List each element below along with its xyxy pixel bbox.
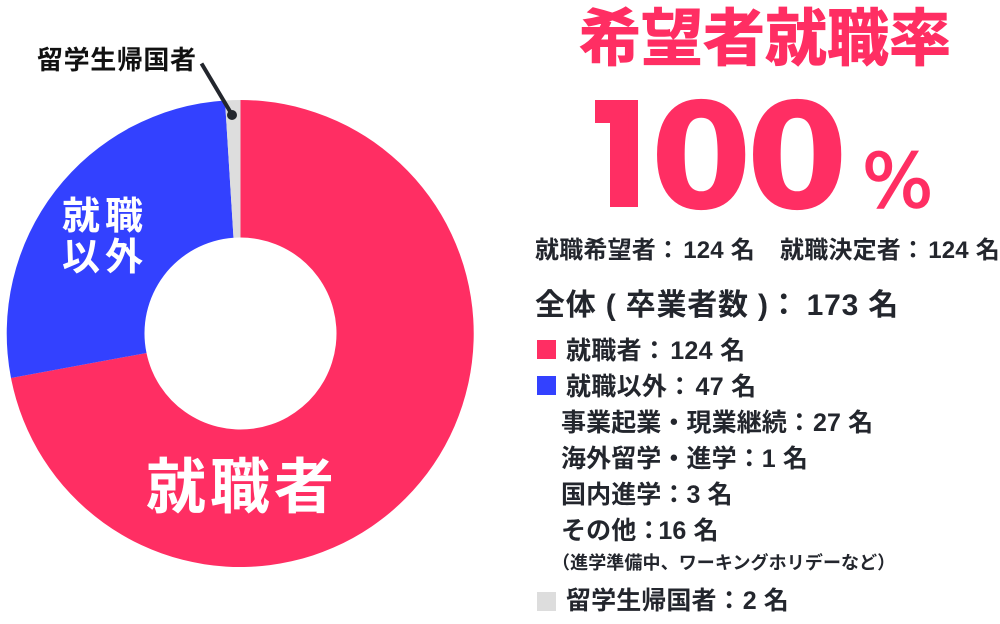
big number bbox=[595, 72, 848, 243]
total: 全体 ( 卒業者数 )：173 名 bbox=[535, 289, 899, 322]
legend bbox=[537, 337, 895, 615]
label: other bbox=[62, 196, 148, 279]
label: other: 以外 bbox=[62, 237, 148, 279]
label: other: 就職 bbox=[62, 196, 148, 238]
segment: other bbox=[7, 100, 234, 378]
heading: 希望者就職率 bbox=[579, 5, 951, 74]
percent sign: % bbox=[862, 137, 933, 225]
label arrow bbox=[202, 64, 237, 120]
stats line: 就職希望者：124 名 bbox=[535, 237, 755, 264]
swatch: employed bbox=[537, 340, 556, 359]
sub item: その他：16 名 bbox=[561, 517, 719, 545]
swatch: other bbox=[537, 376, 556, 395]
label: employed: 就職者 bbox=[146, 454, 338, 521]
legend item: 留学生帰国者：2 名 bbox=[566, 587, 789, 615]
swatch: returnees bbox=[537, 592, 556, 611]
segment: employed bbox=[11, 100, 474, 567]
legend item: 就職以外：47 名 bbox=[566, 373, 756, 401]
stats line: 就職決定者：124 名 bbox=[780, 237, 1000, 264]
note: （進学準備中、ワーキングホリデーなど） bbox=[552, 553, 895, 573]
sub item: 国内進学：3 名 bbox=[561, 481, 733, 509]
donut chart bbox=[6, 62, 474, 567]
sub item: 事業起業・現業継続：27 名 bbox=[561, 409, 873, 437]
digit 0: 0 bbox=[746, 72, 848, 243]
sub item: 海外留学・進学：1 名 bbox=[561, 445, 808, 473]
legend item: 就職者：124 名 bbox=[566, 337, 745, 365]
digit 0: 0 bbox=[650, 72, 752, 243]
segment: international returnees bbox=[225, 100, 240, 238]
label: returnees: 留学生帰国者 bbox=[37, 45, 197, 75]
